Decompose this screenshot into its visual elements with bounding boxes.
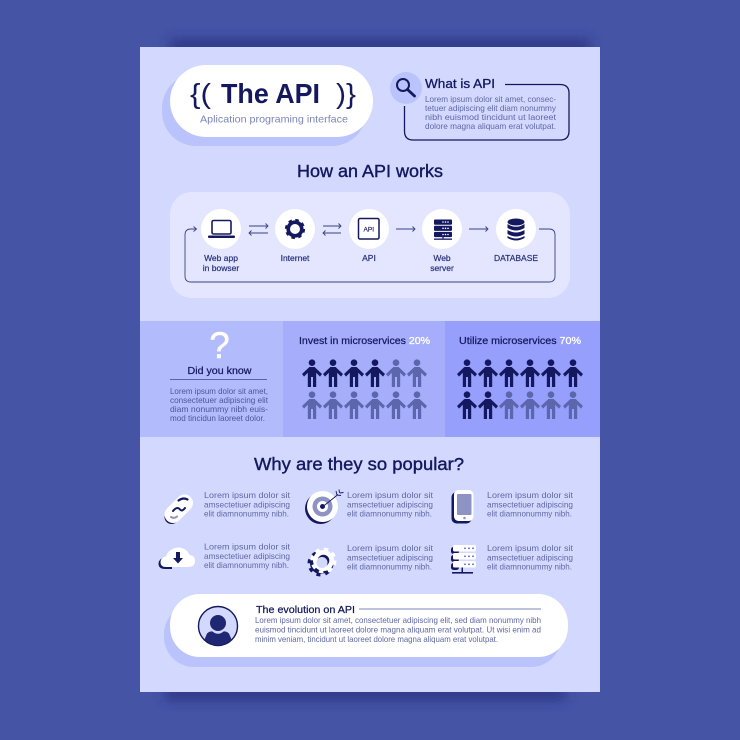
reason: settings: Lorem ipsum dolor sit bbox=[347, 544, 434, 553]
node: web server: server bbox=[430, 263, 454, 273]
reason: settings: amsectetiuer adipiscing bbox=[347, 554, 433, 562]
panel: utilize microservices bbox=[445, 321, 600, 437]
body text: Lorem ipsum dolor sit amet, consec- bbox=[425, 95, 556, 104]
icon: magnifier bbox=[390, 72, 422, 104]
body text: dolore magna aliquam erat volutpat. bbox=[425, 122, 556, 131]
reason: mobile: amsectetiuer adipiscing bbox=[487, 500, 573, 510]
panel: what is API bbox=[390, 72, 569, 140]
outline frame bbox=[404, 84, 569, 140]
body text bbox=[425, 95, 557, 131]
node: web server bbox=[422, 209, 462, 273]
icon: server rack bbox=[451, 545, 476, 574]
reason: target bbox=[305, 490, 434, 524]
arrows: web app to internet bbox=[249, 224, 268, 236]
heading: why are they so popular: Why are they so popular? bbox=[254, 454, 464, 474]
subtitle: Aplication programing interface bbox=[200, 114, 348, 126]
reason: server: Lorem ipsum dolor sit bbox=[487, 544, 574, 553]
loop arrow bbox=[185, 226, 555, 282]
panel: API flow diagram bbox=[170, 192, 570, 298]
reason: cloud download: Lorem ipsum dolor sit bbox=[204, 542, 291, 552]
heading: Did you know bbox=[188, 365, 252, 377]
body text: nibh euismod tincidunt ut laoreet bbox=[425, 113, 557, 122]
panel: did you know bbox=[140, 321, 283, 437]
reason: server bbox=[451, 544, 574, 574]
node: database bbox=[494, 209, 538, 263]
poster page bbox=[140, 47, 600, 692]
reason: chain link: elit diamnonummy nibh. bbox=[204, 510, 289, 518]
reason: target: Lorem ipsum dolor sit bbox=[347, 491, 434, 500]
node: web server: Web bbox=[433, 253, 451, 263]
panel: the evolution on API bbox=[164, 594, 568, 667]
node: database: DATABASE bbox=[494, 253, 538, 263]
body text: Lorem ipsum dolor sit amet, bbox=[170, 387, 268, 396]
reason: settings bbox=[309, 544, 434, 575]
stat heading: Utilize microservices 70% bbox=[459, 335, 581, 347]
reason: cloud download: amsectetiuer adipiscing bbox=[204, 552, 290, 561]
heading: What is API bbox=[425, 77, 495, 91]
heading: The evolution on API bbox=[256, 604, 355, 616]
title: The API bbox=[190, 78, 356, 109]
icon: question mark: ? bbox=[209, 325, 230, 366]
icon: gear bbox=[309, 549, 335, 575]
icon: phone bbox=[452, 490, 474, 524]
reason: target: amsectetiuer adipiscing bbox=[347, 500, 433, 510]
title pill bbox=[162, 65, 373, 146]
node: internet bbox=[275, 209, 315, 263]
title: The API: The API bbox=[221, 78, 320, 109]
heading: how an API works: How an API works bbox=[297, 161, 443, 181]
icon: user avatar bbox=[198, 606, 238, 646]
body text bbox=[255, 616, 541, 644]
arrow: API to web server bbox=[396, 226, 415, 232]
body text: Lorem ipsum dolor sit amet, consectetuer adipiscing elit, sed diam nonummy nibh bbox=[255, 616, 541, 625]
panel: invest in microservices bbox=[283, 321, 445, 437]
reason: chain link: Lorem ipsum dolor sit bbox=[204, 491, 291, 500]
reason: chain link bbox=[171, 491, 291, 518]
reason: server: amsectetiuer adipiscing bbox=[487, 554, 573, 562]
node: web app: in bowser bbox=[203, 263, 239, 273]
body text: consectetuer adipiscing elit bbox=[170, 396, 269, 405]
icon: target bbox=[305, 490, 344, 524]
node: web app bbox=[201, 209, 241, 273]
node: API: API bbox=[362, 253, 376, 263]
body text: mod tincidun laoreet dolor. bbox=[170, 414, 265, 423]
reason: chain link: amsectetiuer adipiscing bbox=[204, 500, 290, 510]
node: web app: Web app bbox=[204, 253, 238, 263]
arrow: web server to database bbox=[469, 226, 488, 232]
title: The API: {( bbox=[190, 78, 212, 109]
title: The API: )} bbox=[336, 78, 356, 109]
body text: diam nonummy nibh euis- bbox=[170, 405, 268, 414]
stat heading: Invest in microservices 20% bbox=[299, 335, 430, 347]
icon: chain bbox=[171, 498, 188, 518]
reason: settings: elit diamnonummy nibh. bbox=[347, 562, 432, 572]
node: internet: Internet bbox=[281, 253, 310, 263]
body text: euismod tincidunt ut laoreet dolore magna aliquam erat volutpat. Ut wisi enim ad bbox=[255, 626, 541, 634]
reason: mobile bbox=[452, 490, 574, 524]
reason: mobile: elit diamnonummy nibh. bbox=[487, 510, 572, 518]
node: API: API bbox=[364, 226, 374, 234]
icon: cloud bbox=[158, 548, 195, 569]
reason: cloud download: elit diamnonummy nibh. bbox=[204, 561, 289, 570]
body text: tetuer adipiscing elit diam nonummy bbox=[425, 104, 557, 113]
reason: target: elit diamnonummy nibh. bbox=[347, 510, 432, 518]
body text bbox=[170, 387, 269, 423]
pictogram: 8 of 12 people bbox=[457, 359, 583, 419]
pictogram: 4 of 12 people bbox=[302, 359, 427, 419]
reason: mobile: Lorem ipsum dolor sit bbox=[487, 491, 574, 500]
arrows: internet to API bbox=[323, 224, 341, 236]
node: API bbox=[349, 209, 389, 263]
reason: server: elit diamnonummy nibh. bbox=[487, 562, 572, 572]
reason: cloud download bbox=[158, 542, 291, 570]
body text: minim veniam, tincidunt ut laoreet dolore magna aliquam erat volutpat. bbox=[255, 635, 498, 644]
